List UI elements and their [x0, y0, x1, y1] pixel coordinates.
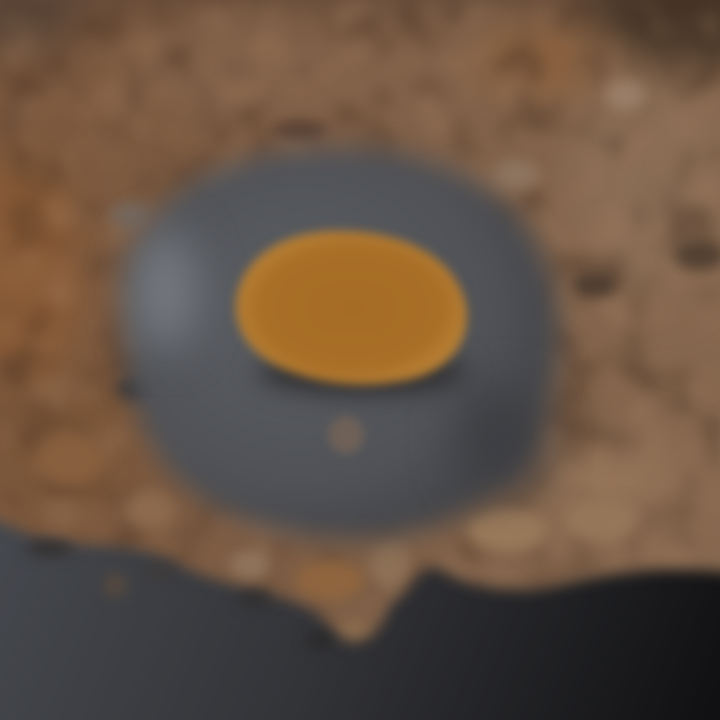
small grain piece — [328, 416, 364, 454]
dark gaps along grain edge — [26, 374, 334, 649]
golden mound — [236, 231, 467, 384]
grain mottling light — [2, 0, 720, 572]
shadow under mound — [257, 350, 467, 394]
grain colour shading — [0, 0, 720, 545]
central slate circle — [125, 148, 559, 539]
grain clusters — [36, 80, 720, 647]
light reflection on slate — [133, 230, 545, 495]
